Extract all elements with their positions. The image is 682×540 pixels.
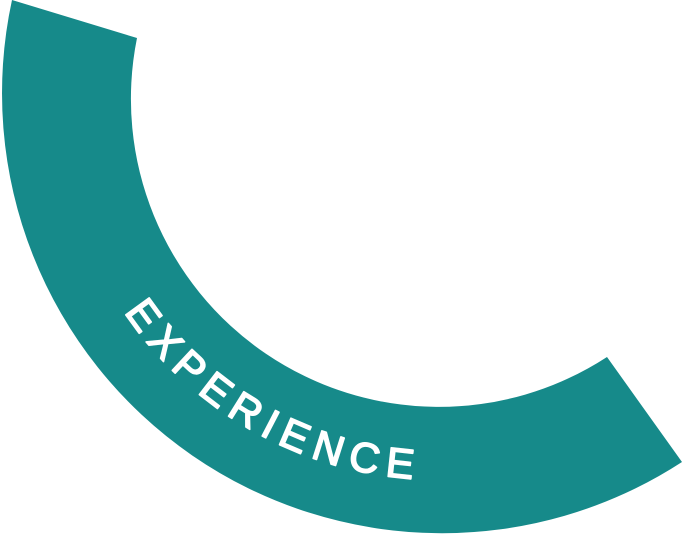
heading: EXPERIENCE curved label: EXPERIENCE [125,297,414,480]
